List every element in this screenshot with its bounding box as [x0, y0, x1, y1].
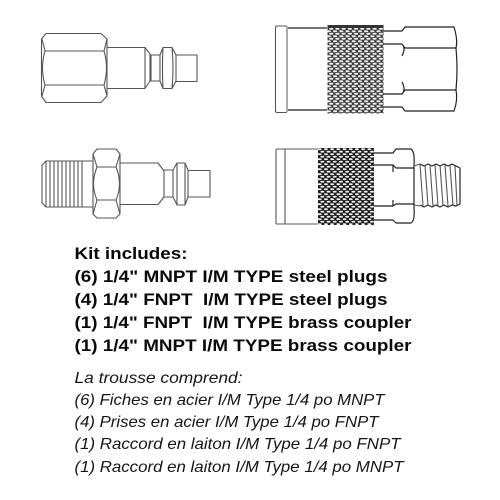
- item: Raccord MNPT: (1) Raccord en laiton I/M Type 1/4 po MNPT: [74, 459, 405, 476]
- text block: kit contents in English: [74, 244, 412, 355]
- item: MNPT steel plugs: (6) 1/4" MNPT I/M TYPE steel plugs: [74, 267, 388, 286]
- text block: kit contents in French: [74, 370, 405, 476]
- item: Prises en acier: (4) Prises en acier I/M Type 1/4 po FNPT: [74, 414, 380, 431]
- icon: MNPT steel plug: [42, 149, 210, 218]
- knurled collar: [318, 148, 374, 225]
- heading: Kit includes: Kit includes:: [74, 244, 188, 263]
- knurled collar: [328, 25, 384, 114]
- heading: La trousse comprend: La trousse comprend:: [74, 370, 242, 387]
- item: Raccord FNPT: (1) Raccord en laiton I/M Type 1/4 po FNPT: [74, 436, 402, 453]
- item: Fiches en acier: (6) Fiches en acier I/M Type 1/4 po MNPT: [74, 392, 386, 409]
- item: FNPT steel plugs: (4) 1/4" FNPT I/M TYPE steel plugs: [74, 290, 388, 309]
- icon: MNPT brass coupler: [276, 148, 460, 225]
- icon: FNPT brass coupler: [276, 25, 457, 114]
- icon: FNPT steel plug: [42, 34, 197, 102]
- item: MNPT brass coupler: (1) 1/4" MNPT I/M TYPE brass coupler: [74, 336, 412, 355]
- item: FNPT brass coupler: (1) 1/4" FNPT I/M TYPE brass coupler: [74, 313, 412, 332]
